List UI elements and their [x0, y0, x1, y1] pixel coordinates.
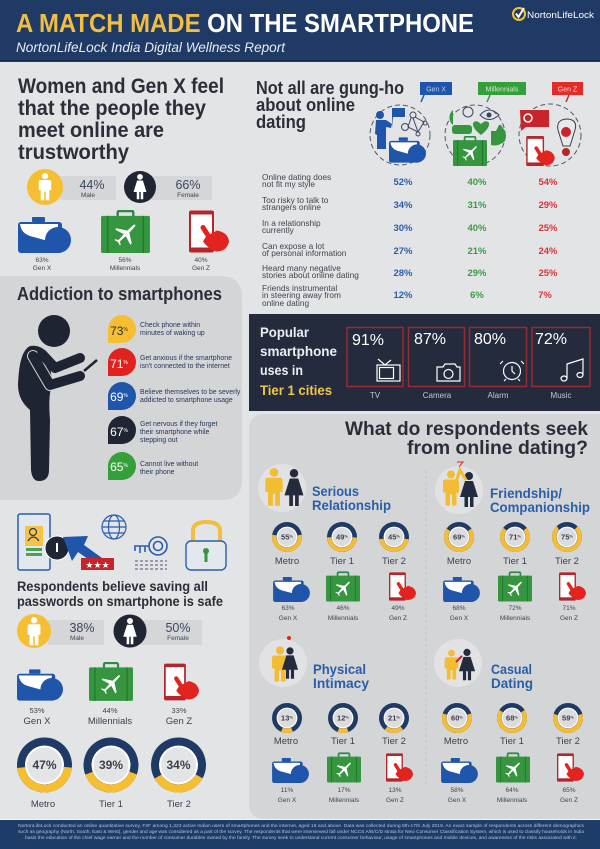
millennials 44% — [88, 663, 133, 727]
group icon: gen x: Gen X — [426, 86, 446, 94]
header banner — [0, 0, 600, 62]
row 4: Can expose a lot — [262, 241, 325, 251]
stat 69%: 69 — [110, 390, 123, 404]
panel: addiction to smartphones — [0, 276, 242, 500]
ring metro 13: 13 — [281, 714, 289, 722]
row 6: online dating — [262, 298, 309, 308]
millennials 64: Millennials — [497, 797, 528, 804]
stat: male 44%: 44% — [79, 178, 105, 192]
ring tier 1 71: 71 — [509, 532, 517, 542]
row 3: currently — [262, 225, 295, 235]
gen z 33% — [164, 664, 199, 727]
row 4 — [262, 241, 558, 258]
card: music: Music — [551, 391, 571, 400]
ring metro 60: Metro — [444, 736, 468, 747]
ring metro 55: % — [289, 534, 293, 538]
ring tier 2 21: Tier 2 — [382, 736, 406, 747]
gen z 65: Gen Z — [560, 797, 578, 804]
ring tier 2 45: 45 — [388, 532, 396, 542]
stat: male 38% — [17, 614, 104, 648]
row 5: stories about online dating — [262, 270, 359, 280]
gen z 40%: 40% — [194, 257, 208, 264]
row 3: In a relationship — [262, 218, 321, 228]
row 4: 21% — [467, 246, 487, 257]
icon: high five couple — [435, 462, 483, 514]
gen x 58: Gen X — [448, 797, 467, 804]
stat 65%: % — [123, 463, 128, 469]
subtitle: NortonLifeLock India Digital Wellness Report — [16, 39, 286, 55]
ring tier 2 21: 21 — [388, 714, 396, 722]
sub-panel: friendship companionship: Friendship/ — [490, 485, 562, 501]
gen x 68: 68% — [452, 605, 466, 612]
stat: female 66%: Female — [177, 192, 199, 199]
millennials 72 — [498, 572, 532, 622]
row 6: 12% — [393, 290, 413, 301]
row 1: not fit my style — [262, 179, 315, 189]
row 4: 27% — [393, 246, 413, 257]
row 1 — [262, 172, 558, 189]
ring metro 69: % — [461, 534, 465, 538]
icon: holding hands couple — [258, 464, 306, 512]
gen z 49 — [389, 572, 416, 622]
stat 65%: Cannot live without — [140, 461, 198, 468]
gen x 63: Gen X — [279, 615, 298, 622]
ring tier 2 59 — [552, 702, 584, 747]
ring tier 1 71: Tier 1 — [503, 556, 527, 567]
millennials 46 — [326, 572, 360, 622]
millennials 46: 46% — [336, 605, 350, 612]
row 4: of personal information — [262, 248, 347, 258]
ring tier 2 75 — [549, 519, 585, 567]
row 5: Heard many negative — [262, 263, 341, 273]
gen z 13 — [386, 753, 413, 804]
heading: women and gen x: meet online are — [18, 119, 164, 142]
gen z 40%: Gen Z — [192, 265, 210, 272]
millennials 56%: 56% — [118, 257, 132, 264]
gen x 53%: 53% — [29, 706, 45, 715]
ring tier 1 68: % — [514, 714, 518, 720]
stat 65%: 65 — [110, 460, 123, 474]
icon: embracing couple — [259, 636, 307, 687]
ring metro 60: 60 — [451, 714, 459, 722]
ring metro 13: Metro — [274, 736, 298, 747]
millennials 64 — [496, 753, 530, 804]
ring tier 1 71 — [497, 519, 533, 567]
ring metro 60: % — [459, 714, 463, 720]
heading: Tier 1 cities — [260, 382, 332, 398]
ring metro 69 — [441, 519, 477, 567]
stat 65% — [108, 452, 198, 480]
row 2: 31% — [467, 200, 487, 211]
card: tv — [347, 328, 403, 400]
row 3: 30% — [393, 223, 413, 234]
footer methodology note: basis the education of the chief wage earner and the number of consumer durables owned by the family. The survey seek to understand current consumer behaviour, usage of smartphones and mobile devices, and awareness of the risks associated with it. — [25, 835, 577, 840]
ring tier 2 59: % — [570, 714, 574, 720]
sub-panel: physical intimacy: Physical — [313, 661, 366, 677]
row 2: 29% — [538, 200, 558, 211]
heading: women and gen x: Women and Gen X feel — [18, 75, 224, 98]
ring tier 2 21 — [376, 700, 412, 747]
footer methodology note — [0, 819, 600, 849]
row 2 — [262, 195, 558, 212]
card: music: 72% — [535, 331, 567, 348]
row 5 — [262, 263, 558, 280]
logo — [513, 8, 594, 21]
row 6: in steering away from — [262, 290, 341, 300]
gen x 58: 58% — [450, 787, 464, 794]
gen z 33%: Gen Z — [166, 716, 192, 727]
sub-panel: serious relationship: Relationship — [312, 497, 391, 513]
ring tier 1 68 — [494, 700, 530, 747]
card: camera — [408, 328, 464, 400]
ring metro 55 — [272, 522, 302, 567]
stat: female 66%: 66% — [175, 178, 201, 192]
heading: not all are gung-ho: Not all are gung-ho — [256, 78, 404, 98]
ring: metro 47%: 47% — [32, 758, 57, 772]
ring tier 2 45: % — [396, 534, 400, 538]
sub-panel: serious relationship: Serious — [312, 483, 359, 499]
millennials 46: Millennials — [328, 615, 359, 622]
row 3: 25% — [538, 223, 558, 234]
row 2: strangers online — [262, 202, 321, 212]
gen z 33%: 33% — [171, 706, 187, 715]
icon: phone profile — [18, 514, 50, 570]
group icon: millennials: Millennials — [486, 86, 519, 94]
stat 73%: Check phone within — [140, 322, 200, 329]
millennials 72: Millennials — [500, 615, 531, 622]
card: alarm: Alarm — [488, 391, 509, 400]
ring tier 1 49: Tier 1 — [330, 556, 354, 567]
row 1: 54% — [538, 177, 558, 188]
stat 69% — [108, 382, 241, 410]
heading: passwords: Respondents believe saving all — [17, 579, 208, 594]
heading: women and gen x: trustworthy — [18, 141, 129, 164]
gen z 49: 49% — [391, 605, 405, 612]
sub-panel: friendship companionship — [435, 462, 590, 622]
stat: female 50%: 50% — [165, 621, 191, 635]
ring metro 60 — [441, 702, 473, 747]
heading: Addiction to smartphones — [17, 284, 222, 304]
row 5: 28% — [393, 268, 413, 279]
card: camera: Camera — [423, 391, 452, 400]
gen z 71 — [559, 572, 586, 622]
stat 71% — [108, 348, 232, 376]
ring tier 1 12: 12 — [337, 714, 345, 722]
stat 67%: their smartphone while — [140, 429, 209, 436]
ring: tier 1 39%: 39% — [99, 758, 123, 772]
millennials 17 — [327, 753, 361, 804]
stat 67% — [108, 416, 217, 444]
gen x 68 — [443, 577, 480, 622]
icon: globe — [102, 515, 126, 539]
stat 71%: % — [123, 360, 128, 366]
password icons row — [18, 514, 226, 570]
ring tier 2 59: 59 — [562, 714, 570, 722]
row 2: 34% — [393, 200, 413, 211]
gen z 13: Gen Z — [386, 797, 404, 804]
ring: metro 47%: Metro — [31, 799, 55, 810]
ring: tier 2 34%: 34% — [166, 758, 191, 772]
ring metro 69: 69 — [453, 532, 461, 542]
card: music — [532, 328, 590, 400]
card: alarm — [470, 328, 526, 400]
heading: women and gen x: that the people they — [18, 97, 206, 120]
ring tier 1 68: 68 — [506, 714, 514, 722]
heading: passwords: passwords on smartphone is safe — [17, 594, 223, 609]
ring metro 55: 55 — [281, 532, 289, 542]
ring tier 2 75: 75 — [561, 532, 569, 542]
row 6 — [262, 283, 552, 308]
ring metro 13 — [270, 701, 304, 747]
sub-panel: physical intimacy: Intimacy — [313, 675, 369, 691]
ring tier 1 68: Tier 1 — [500, 736, 524, 747]
icon: padlock — [186, 522, 226, 570]
ring metro 13: % — [289, 714, 293, 720]
stat 67%: 67 — [110, 425, 123, 439]
group icon: millennials — [445, 82, 526, 166]
stat 73% — [108, 315, 205, 343]
stat 71%: Get anxious if the smartphone — [140, 355, 232, 362]
footer methodology note: such as geography (North, South, East & West), gender and age was considered as a part of the survey. The respondents that were interviewed fall under NCCS A/B/C/D strata for New Consumer Classification System, which is used to classify households in India — [18, 829, 584, 834]
stat 67%: stepping out — [140, 437, 178, 444]
ring tier 1 49 — [327, 522, 357, 567]
ring metro 69: Metro — [447, 556, 471, 567]
millennials 17: Millennials — [329, 797, 360, 804]
row 4: 24% — [538, 246, 558, 257]
heading: uses in — [260, 362, 303, 378]
row 3 — [262, 218, 558, 235]
ring tier 1 12: % — [345, 714, 349, 720]
millennials 56%: Millennials — [110, 265, 141, 272]
millennials 64: 64% — [505, 787, 519, 794]
gen x 53% — [17, 669, 63, 727]
heading: from online dating? — [407, 438, 588, 459]
panel: popular smartphone uses — [249, 314, 600, 411]
sub-panel: serious relationship — [258, 464, 416, 622]
ring: tier 2 34%: Tier 2 — [167, 799, 191, 810]
ring tier 1 71: % — [517, 534, 521, 538]
ring tier 1 12: Tier 1 — [331, 736, 355, 747]
heading: not all are gung-ho: about online — [256, 95, 355, 115]
row 3: 40% — [467, 223, 487, 234]
stat 71%: isn't connected to the internet — [140, 363, 230, 370]
sub-panel: casual dating: Dating — [491, 675, 533, 691]
ring metro 55: Metro — [275, 556, 299, 567]
group icon: gen z — [519, 82, 583, 166]
stat: female 50% — [114, 614, 202, 648]
heading: What do respondents seek — [345, 419, 588, 440]
gen x 63 — [273, 577, 310, 622]
row 6: 6% — [470, 290, 484, 301]
stat 69%: Believe themselves to be severly — [140, 389, 241, 396]
millennials 56% — [101, 211, 150, 272]
gen z 71: 71% — [562, 605, 576, 612]
millennials 72: 72% — [508, 605, 522, 612]
ring: tier 1 39%: Tier 1 — [99, 799, 123, 810]
gen x 11: Gen X — [278, 797, 297, 804]
stat: male 38%: 38% — [69, 621, 95, 635]
gen x 63% — [18, 217, 71, 272]
row 6: 7% — [538, 290, 552, 301]
ring tier 2 75: % — [569, 534, 573, 538]
stat 67%: Get nervous if they forget — [140, 421, 217, 428]
stat: male 38%: Male — [70, 635, 84, 642]
gen z 71: Gen Z — [560, 615, 578, 622]
ring: tier 2 34% — [147, 733, 210, 810]
footer methodology note: NortonLifeLock conducted an online quantitative survey, F2F among 1,323 active Indian users of smartphones and the internet, aged 18 and above. Data was collected during 6th-17th July 2019. An exact sample of respondents across different demographics — [18, 823, 585, 828]
ring tier 2 21: % — [396, 714, 400, 720]
row 1: 52% — [393, 177, 413, 188]
gen x 11 — [272, 758, 309, 804]
stat 69%: % — [123, 393, 128, 399]
gen x 63%: Gen X — [33, 265, 52, 272]
stat 73%: minutes of waking up — [140, 330, 205, 337]
logo: NortonLifeLock — [527, 10, 594, 21]
stat: male 44% — [27, 169, 116, 205]
gen x 53%: Gen X — [24, 716, 51, 727]
icon: person on phone — [18, 315, 97, 481]
row 5: 25% — [538, 268, 558, 279]
gen x 63: 63% — [281, 605, 295, 612]
title: A MATCH MADE ON THE SMARTPHONE — [16, 10, 474, 38]
sub-panel: casual dating: Casual — [491, 661, 532, 677]
stat 69%: addicted to smartphone usage — [140, 397, 233, 404]
heading: not all are gung-ho: dating — [256, 112, 306, 132]
row 2: Too risky to talk to — [262, 195, 329, 205]
stat 73%: % — [123, 327, 128, 333]
gen x 58 — [441, 758, 478, 804]
gen z 49: Gen Z — [389, 615, 407, 622]
ring tier 2 45: Tier 2 — [382, 556, 406, 567]
ring: metro 47% — [17, 738, 72, 810]
ring tier 2 75: Tier 2 — [555, 556, 579, 567]
card: alarm: 80% — [474, 331, 506, 348]
icon: cursor arrow — [45, 536, 102, 564]
millennials 44%: Millennials — [88, 716, 132, 727]
stat: female 66% — [124, 171, 212, 203]
stat: male 44%: Male — [81, 192, 95, 199]
sub-panel: physical intimacy — [259, 636, 413, 804]
panel: what do respondents seek — [249, 414, 600, 819]
gen z 65 — [557, 753, 584, 804]
row 1: 40% — [467, 177, 487, 188]
ring tier 1 49: 49 — [336, 532, 344, 542]
gen x 68: Gen X — [450, 615, 469, 622]
millennials 17: 17% — [337, 787, 351, 794]
stat 73%: 73 — [110, 324, 123, 338]
gen z 40% — [189, 210, 229, 272]
sub-panel: casual dating — [434, 639, 584, 804]
stat: female 50%: Female — [167, 635, 189, 642]
row 1: Online dating does — [262, 172, 331, 182]
heading: Popular — [260, 324, 310, 340]
group icon: gen z: Gen Z — [558, 86, 578, 94]
card: camera: 87% — [414, 331, 446, 348]
icon: key — [135, 537, 167, 569]
stat 65%: their phone — [140, 469, 175, 476]
icon: flower couple — [434, 639, 482, 687]
ring tier 1 12 — [326, 701, 360, 747]
row 6: Friends instrumental — [262, 283, 337, 293]
row 5: 29% — [467, 268, 487, 279]
stat 67%: % — [123, 428, 128, 434]
icon: password stars: ★★★ — [85, 560, 110, 570]
ring tier 2 45 — [379, 522, 409, 567]
gen x 63%: 63% — [35, 257, 49, 264]
ring: tier 1 39% — [81, 735, 141, 810]
card: tv: TV — [370, 391, 381, 400]
icon: password stars — [81, 558, 114, 570]
card: tv: 91% — [352, 332, 384, 349]
gen z 13: 13% — [388, 787, 402, 794]
sub-panel: friendship companionship: Companionship — [490, 499, 590, 515]
ring tier 1 49: % — [344, 534, 348, 538]
gen z 65: 65% — [562, 787, 576, 794]
millennials 44%: 44% — [102, 706, 118, 715]
gen x 11: 11% — [281, 787, 293, 794]
table: reasons by generation — [262, 172, 558, 308]
ring tier 2 59: Tier 2 — [556, 736, 580, 747]
group icon: gen x — [370, 82, 452, 165]
heading: smartphone — [260, 343, 337, 359]
stat 71%: 71 — [110, 357, 123, 371]
